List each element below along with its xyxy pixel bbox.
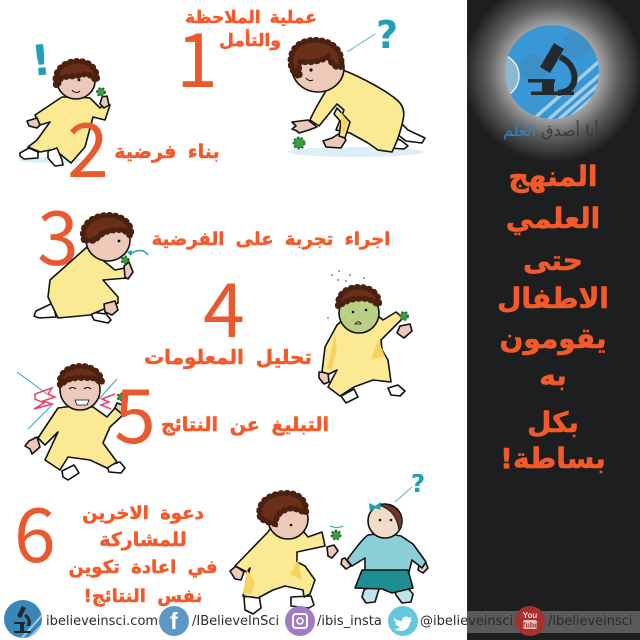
illustration: baby sitting with exclamation, step 2 xyxy=(18,35,110,166)
footer: instagram xyxy=(285,606,382,636)
illustration: baby crawling, step 1: ? xyxy=(376,13,398,57)
footer: instagram: /ibis_insta xyxy=(317,614,382,629)
step 6 text xyxy=(68,503,218,607)
heading: sidebar title: يقومون xyxy=(499,322,607,355)
logo wordmark: أنا أصدق العلم xyxy=(503,120,599,140)
illustration: baby sitting with exclamation, step 2: ! xyxy=(29,35,53,86)
step 5 text: التبليغ عن النتائج xyxy=(161,414,329,436)
footer: facebook: /IBelieveInSci xyxy=(192,614,279,629)
illustration: baby with green face, step 4 xyxy=(319,270,412,403)
footer: facebook: f xyxy=(170,608,178,634)
footer: twitter xyxy=(388,606,513,636)
logo: microscope badge xyxy=(505,25,599,119)
footer: facebook xyxy=(159,606,279,636)
step 4 text: تحليل المعلومات xyxy=(144,345,312,369)
heading: sidebar title xyxy=(497,160,609,475)
step 2 number: 2 xyxy=(67,90,109,199)
footer: twitter: @ibelieveinsci xyxy=(420,614,513,629)
footer: website xyxy=(4,600,158,640)
illustration: two babies sharing, step 6: ? xyxy=(411,469,425,498)
footer: youtube: Tube xyxy=(522,622,538,630)
step 4 number: 4 xyxy=(203,250,245,359)
illustration: baby crawling, step 1 xyxy=(287,13,425,157)
step 1 text: عملية الملاحظة xyxy=(185,8,317,28)
step 6 text: للمشاركة xyxy=(99,529,187,551)
illustration: baby tasting leaf, step 3 xyxy=(34,215,148,323)
footer: youtube xyxy=(515,606,633,636)
heading: sidebar title: بكل xyxy=(527,406,579,439)
step 1 number: 1 xyxy=(176,0,218,109)
heading: sidebar title: به xyxy=(539,359,567,392)
step 6 number: 6 xyxy=(14,475,56,584)
heading: sidebar title: المنهج xyxy=(509,160,597,193)
footer: youtube: You xyxy=(523,611,537,620)
panel: dark sidebar xyxy=(467,0,640,640)
footer: website: ibelieveinsci.com xyxy=(46,614,158,629)
step 1 text: والتأمل xyxy=(219,29,281,51)
step 2 text: بناء فرضية xyxy=(114,141,220,163)
step 6 text: في اعادة تكوين xyxy=(68,557,218,578)
heading: sidebar title: حتى xyxy=(523,244,583,277)
illustration: two babies sharing, step 6 xyxy=(230,469,428,614)
heading: sidebar title: بساطة! xyxy=(500,442,606,475)
step 1 text xyxy=(185,8,317,51)
step 5 number: 5 xyxy=(114,356,156,465)
background: white content area xyxy=(0,0,467,640)
heading: sidebar title: الاطفال xyxy=(497,282,609,315)
step 6 text: نفس النتائج! xyxy=(84,586,202,607)
footer strip on dark sidebar xyxy=(467,611,640,633)
illustration: baby crying, step 5 xyxy=(17,366,125,480)
footer: youtube: /ibelieveinsci xyxy=(548,614,633,629)
heading: sidebar title: العلمي xyxy=(506,202,600,235)
step 6 text: دعوة الاخرين xyxy=(82,503,204,524)
step 3 number: 3 xyxy=(37,178,79,287)
step 3 text: اجراء تجربة على الفرضية xyxy=(152,229,390,250)
